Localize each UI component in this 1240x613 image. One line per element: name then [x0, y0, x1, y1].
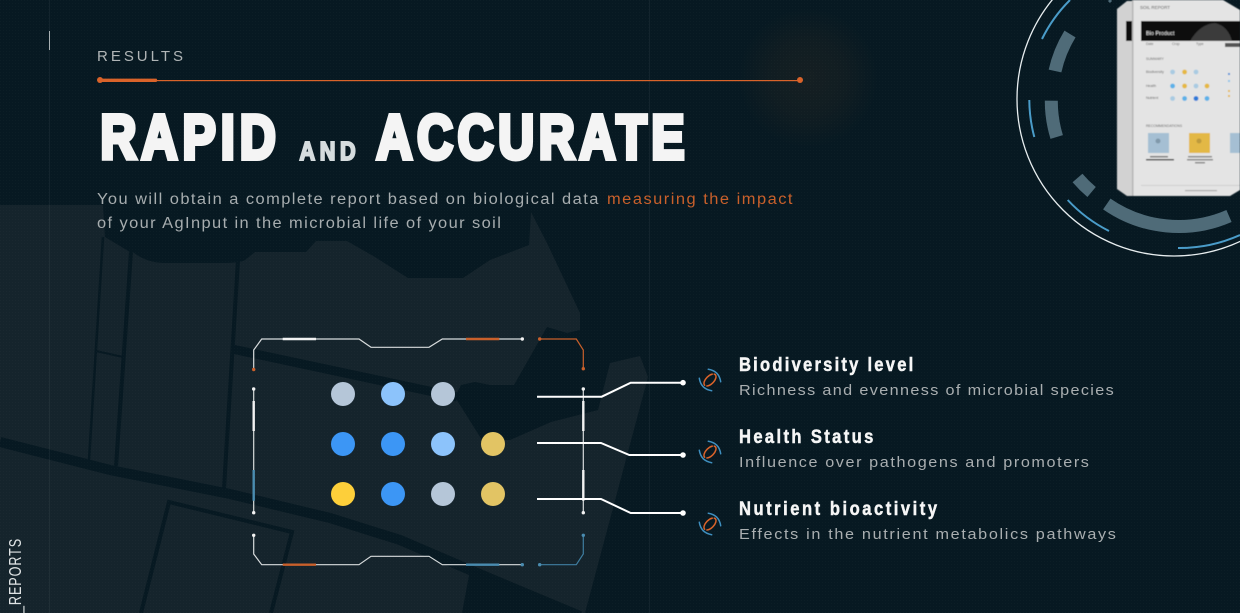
report preview: SUMMARY	[1146, 57, 1164, 61]
report preview: SOIL REPORT	[1140, 5, 1170, 10]
item: health status: Influence over pathogens and promoters	[739, 455, 1089, 471]
item: biodiversity level	[739, 354, 1114, 399]
title: RAPID	[100, 102, 276, 172]
report preview: Nutrient	[1146, 96, 1158, 100]
orange glow	[738, 8, 878, 148]
connector: health	[537, 443, 686, 458]
connector: biodiversity	[537, 380, 686, 397]
report banner	[1141, 21, 1240, 41]
dot matrix	[331, 382, 505, 506]
item: nutrient bioactivity	[739, 498, 1116, 543]
front page	[1132, 0, 1240, 196]
item: biodiversity level: Richness and evenness of microbial species	[739, 383, 1114, 399]
report preview: Crop	[1172, 42, 1180, 46]
intro text: You will obtain a complete report based on biological data	[97, 191, 598, 208]
icon: nutrient ring	[699, 513, 721, 535]
report tiles	[1146, 133, 1240, 164]
report preview: Date	[1146, 42, 1153, 46]
item: nutrient bioactivity: Effects in the nutrient metabolics pathways	[739, 527, 1116, 543]
intro text: of your AgInput in the microbial life of your soil	[97, 215, 501, 232]
title: ACCURATE	[376, 102, 685, 172]
title: AND	[300, 138, 356, 166]
report preview	[1117, 0, 1240, 196]
ring graphic	[1017, 0, 1240, 256]
item: biodiversity level: Biodiversity level	[739, 354, 913, 375]
item: health status: Health Status	[739, 426, 873, 447]
back page	[1117, 1, 1140, 196]
report banner: Bio Product	[1146, 31, 1175, 37]
icon: health ring	[699, 441, 721, 463]
intro text: measuring the impact	[607, 191, 793, 208]
report preview: RECOMMENDATIONS	[1146, 124, 1183, 128]
report dots	[1170, 70, 1230, 101]
title	[100, 102, 684, 172]
connector: nutrient	[537, 499, 686, 516]
report preview: Biodiversity	[1146, 70, 1164, 74]
report preview: Health	[1146, 84, 1156, 88]
intro text	[97, 191, 793, 232]
orange rule	[97, 77, 803, 83]
icon: biodiversity ring	[699, 369, 721, 391]
item: health status	[739, 426, 1089, 471]
map background	[0, 205, 648, 613]
side label: _REPORTS	[6, 539, 26, 613]
section label: RESULTS	[97, 48, 183, 65]
item: nutrient bioactivity: Nutrient bioactivity	[739, 498, 937, 519]
circuit frame	[252, 337, 585, 566]
report preview: Type	[1196, 42, 1204, 46]
